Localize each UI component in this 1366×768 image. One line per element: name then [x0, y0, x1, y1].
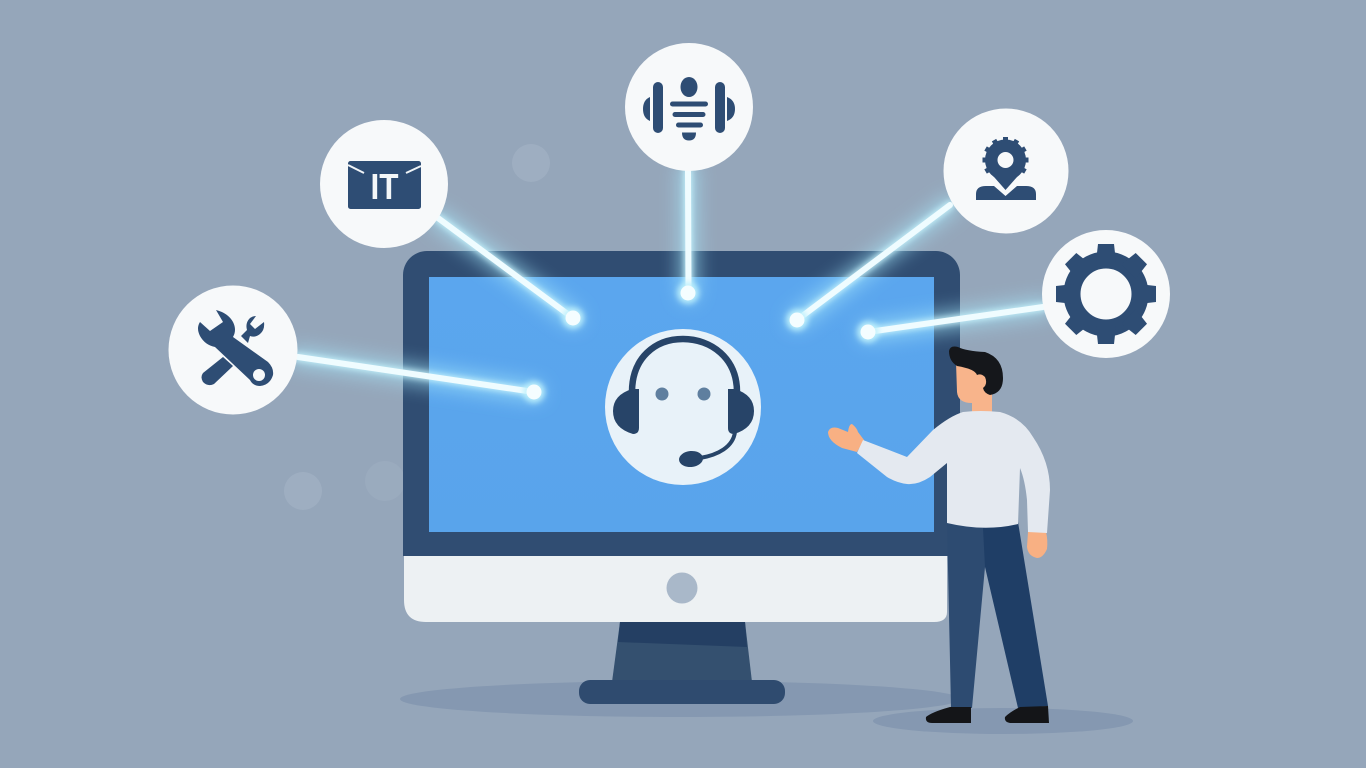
person presenting	[828, 346, 1050, 723]
central headset badge	[605, 329, 761, 485]
shirt	[857, 411, 1050, 533]
neck and face	[956, 362, 992, 413]
monitor stand	[579, 622, 785, 704]
hair	[949, 346, 1003, 395]
monitor bezel	[403, 251, 960, 556]
ear cups	[613, 389, 639, 434]
headband	[632, 339, 737, 392]
icon: wrench and screwdriver	[168, 286, 298, 414]
monitor	[403, 251, 960, 704]
other hand	[1027, 532, 1047, 558]
floor shadows	[400, 681, 1133, 734]
icon: settings gear	[1042, 230, 1170, 358]
decorative bubbles	[284, 144, 550, 510]
monitor chin	[404, 556, 947, 622]
pointing hand	[828, 424, 864, 452]
screen	[429, 277, 934, 532]
shoes	[926, 707, 971, 723]
label: IT: IT	[370, 166, 399, 207]
icon: audio support	[625, 43, 753, 171]
icon: IT envelope	[320, 120, 448, 248]
microphone	[700, 432, 735, 458]
icon: location gear pin	[944, 108, 1068, 234]
face dots	[656, 388, 668, 400]
glowing connector lines	[298, 171, 1043, 403]
power button	[666, 572, 698, 604]
legs	[947, 522, 1018, 708]
